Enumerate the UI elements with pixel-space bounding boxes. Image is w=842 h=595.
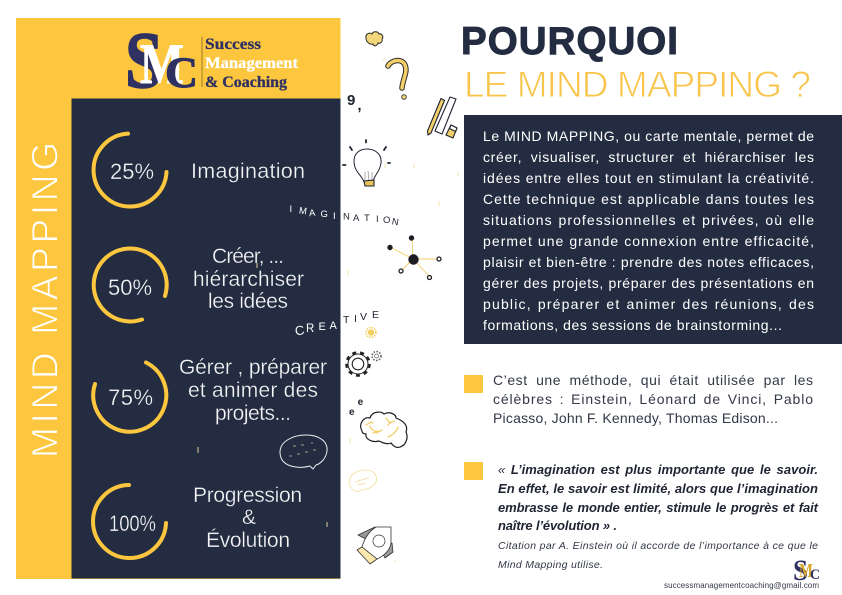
label Progression & Évolution: &	[242, 506, 256, 529]
explanation paragraph: situations professionnelles et privées, où elle	[483, 212, 814, 228]
logo wordmark: & Coaching	[205, 74, 287, 91]
icon: pale speech bubble	[349, 470, 377, 492]
famous users text: célèbres : Einstein, Léonard de Vinci, Pablo	[493, 391, 813, 407]
progress ring 75%	[93, 362, 166, 432]
quotation attribution	[498, 540, 818, 571]
icon: small cloud	[366, 32, 383, 46]
icon: brain	[361, 412, 407, 447]
doodle: curved word IMAGINATION: A	[353, 213, 360, 224]
logo monogram: S	[125, 17, 163, 105]
value 100%: 100%	[109, 511, 156, 536]
footer email: successmanagementcoaching@gmail.com	[664, 581, 819, 590]
footer mini logo	[793, 554, 820, 587]
explanation paragraph: Cette technique est applicable dans toutes les	[483, 191, 814, 207]
footer mini logo: C	[810, 567, 820, 583]
label Gérer, préparer et animer des projets: projets...	[215, 402, 291, 425]
icon: pencil, ruler and eraser	[428, 97, 457, 138]
progress ring 25%	[94, 134, 166, 207]
doodle: curved word CREATIVE: E	[372, 309, 379, 321]
icon: small e marks: e	[349, 407, 355, 418]
label Créer, hiérarchiser les idées: les idées	[208, 290, 288, 313]
decorative yellow ticks	[198, 58, 458, 562]
footer mini logo: S	[793, 554, 808, 587]
explanation paragraph: formations, des sessions de brainstorming...	[483, 317, 782, 333]
logo monogram: M	[140, 33, 184, 96]
label Créer, hiérarchiser les idées: Créer, ...	[212, 245, 284, 268]
doodle: curved word IMAGINATION: M	[298, 205, 308, 217]
bullet: Einstein quote	[464, 462, 819, 571]
icon: rocket	[357, 527, 393, 564]
vertical heading: MIND MAPPING: MIND MAPPING	[24, 142, 66, 458]
doodle: curved word IMAGINATION: I	[376, 214, 379, 225]
progress ring 50%	[94, 248, 167, 321]
icon: question mark	[388, 61, 406, 99]
logo monogram	[125, 17, 198, 105]
stat: 100% Progression & Évolution	[93, 484, 302, 558]
value 75%: 75%	[108, 385, 153, 410]
icon: quotation marks: ,	[357, 97, 362, 114]
progress ring 100%	[93, 485, 166, 558]
explanation paragraph: permet une grande connexion entre efficacité,	[483, 233, 814, 249]
label Progression & Évolution	[193, 484, 302, 552]
doodle: curved word IMAGINATION: T	[364, 213, 370, 224]
doodle: curved word IMAGINATION: I	[290, 204, 292, 215]
famous users text: Picasso, John F. Kennedy, Thomas Edison...	[493, 410, 778, 426]
explanation paragraph: gérer des projets, préparer des présentations en	[483, 275, 814, 291]
panel: navy statistics background	[72, 98, 340, 578]
doodle: speech bubble on navy	[280, 435, 327, 469]
doodle: curved word IMAGINATION: N	[391, 216, 400, 228]
logo: Success Management & Coaching	[125, 17, 299, 105]
value 50%: 50%	[108, 275, 152, 300]
quotation: embrasse le monde entier, stimule le progrès et fait	[498, 500, 819, 515]
yellow square bullet	[464, 375, 483, 393]
icon: small yellow sun	[366, 328, 376, 338]
title	[461, 20, 811, 105]
logo wordmark: Success	[205, 36, 261, 53]
famous users text	[493, 372, 813, 426]
explanation paragraph: plaisir et bien-être : prendre des notes efficaces,	[483, 254, 814, 270]
value 25%: 25%	[110, 159, 154, 184]
quotation: naître l’évolution » .	[498, 518, 617, 533]
doodle: curved word CREATIVE: C	[294, 322, 306, 339]
icon: small e marks: e	[358, 397, 364, 408]
label Créer, hiérarchiser les idées: hiérarchiser	[193, 268, 304, 291]
doodle: curved word CREATIVE: T	[343, 314, 350, 326]
famous users text: C’est une méthode, qui était utilisée par les	[493, 372, 813, 388]
doodle: curved word IMAGINATION: N	[343, 212, 350, 222]
quotation	[498, 462, 819, 533]
doodle: curved word IMAGINATION: I	[333, 211, 336, 222]
doodle: curved word IMAGINATION: G	[320, 209, 328, 220]
label Créer, hiérarchiser les idées	[193, 245, 304, 313]
doodle: curved word CREATIVE: R	[306, 323, 314, 335]
icon: network of connected nodes	[387, 235, 441, 280]
doodle: curved word CREATIVE: E	[318, 321, 326, 333]
label Progression & Évolution: Évolution	[206, 529, 290, 552]
stat: 75% Gérer, préparer et animer des projets	[93, 356, 327, 432]
title line: POURQUOI: POURQUOI	[461, 20, 678, 63]
explanation paragraph: créer, visualiser, structurer et hiérarchiser les	[483, 149, 814, 165]
title line: LE MIND MAPPING ?: LE MIND MAPPING ?	[464, 64, 811, 105]
label Imagination: Imagination	[191, 159, 305, 183]
explanation paragraph: idées entre elles tout en stimulant la créativité.	[483, 170, 814, 186]
quotation attribution: Citation par A. Einstein où il accorde de l’importance à ce que le	[498, 540, 818, 552]
icon: gears	[346, 352, 381, 376]
doodle: curved word CREATIVE: I	[354, 313, 357, 325]
panel: explanation text box	[464, 115, 842, 344]
label Gérer, préparer et animer des projets: et animer des	[188, 379, 318, 402]
doodle: curved word IMAGINATION: A	[309, 208, 317, 219]
logo wordmark: Management	[205, 55, 299, 72]
doodle: curved word CREATIVE	[294, 309, 379, 339]
yellow square bullet	[464, 462, 483, 480]
doodle: curved word IMAGINATION	[290, 204, 400, 228]
label Progression & Évolution: Progression	[193, 484, 302, 507]
quotation: « L’imagination est plus importante que le savoir.	[498, 462, 818, 477]
label Gérer, préparer et animer des projets: Gérer , préparer	[179, 356, 327, 379]
doodle: curved word CREATIVE: A	[330, 320, 338, 332]
doodle: curved word IMAGINATION: O	[383, 215, 390, 226]
stat: 25% Imagination	[94, 134, 305, 207]
panel: left yellow sidebar	[16, 18, 340, 579]
quotation attribution: Mind Mapping utilise.	[498, 559, 603, 571]
logo monogram: C	[165, 50, 198, 97]
explanation paragraph: public, préparer et animer des réunions, des	[483, 296, 814, 312]
logo wordmark	[202, 36, 299, 91]
footer mini logo: M	[799, 560, 813, 582]
label Gérer, préparer et animer des projets	[179, 356, 327, 425]
icon: quotation marks: 9	[347, 92, 355, 109]
icon: light bulb	[343, 140, 390, 186]
explanation paragraph	[483, 128, 814, 333]
stat: 50% Créer, hiérarchiser les idées	[94, 245, 304, 321]
doodle: curved word CREATIVE: V	[360, 311, 367, 323]
explanation paragraph: Le MIND MAPPING, ou carte mentale, permet de	[483, 128, 814, 144]
quotation: En effet, le savoir est limité, alors que l’imagination	[498, 481, 818, 496]
bullet: famous users	[464, 372, 813, 426]
